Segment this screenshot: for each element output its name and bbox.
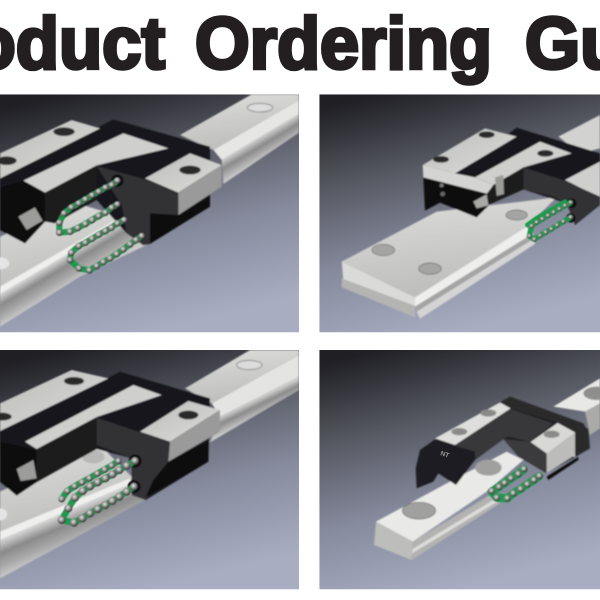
carriage [0, 370, 220, 500]
carriage [0, 119, 222, 245]
rail [374, 378, 600, 560]
rail [342, 115, 600, 319]
ball chains [527, 199, 576, 242]
panel: top-right linear guide, rail end view [319, 94, 600, 332]
carriage [416, 397, 590, 488]
panel: bottom-left linear guide, wide carriage [0, 350, 299, 589]
title [0, 4, 600, 84]
panel: top-left linear guide, four-row ball chain [0, 94, 299, 332]
ball chains [58, 455, 141, 527]
title: Ordering [195, 4, 492, 84]
ball chains [488, 466, 543, 502]
carriage [423, 128, 600, 225]
rail [0, 350, 299, 578]
rail [0, 94, 299, 327]
ball chains [56, 175, 145, 274]
panel: bottom-right miniature linear guide [319, 350, 600, 589]
brand mark: NT [439, 450, 450, 460]
